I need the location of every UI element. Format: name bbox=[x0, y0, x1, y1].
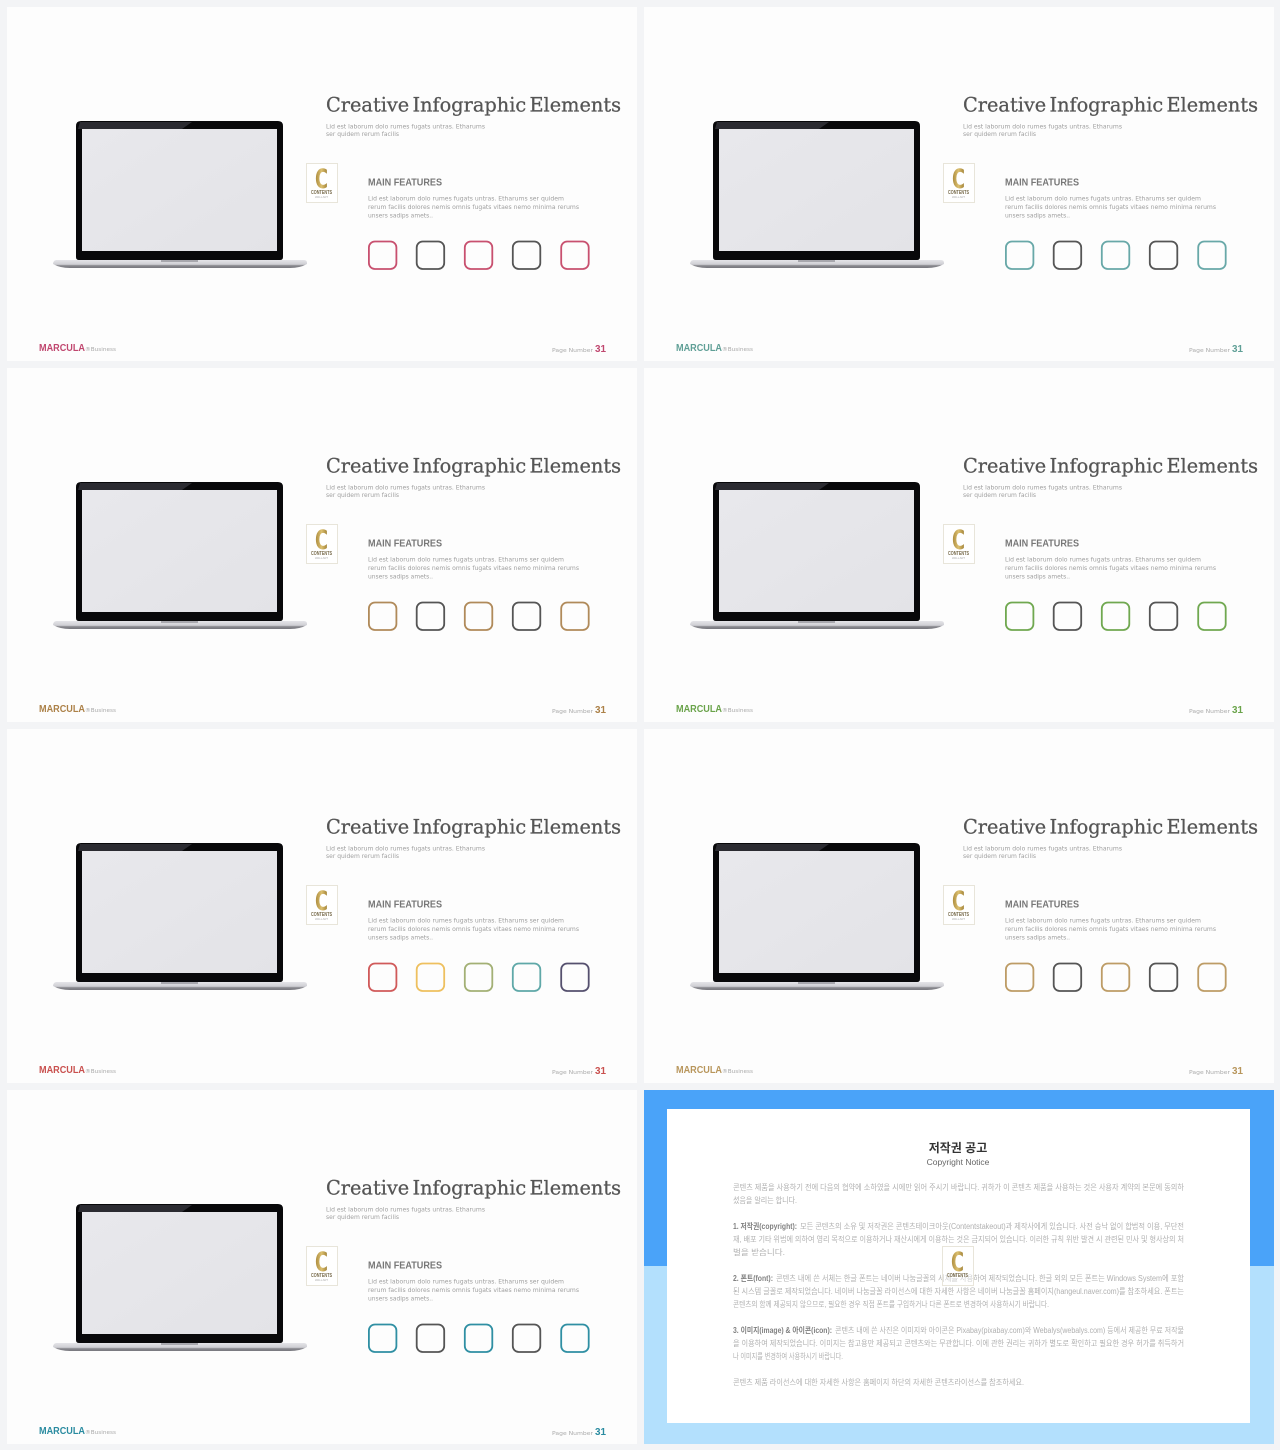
page number bbox=[552, 1427, 606, 1438]
title: Creative Infographic Elements bbox=[326, 1176, 621, 1200]
slide background bbox=[7, 1090, 637, 1444]
icon boxes bbox=[369, 242, 589, 269]
notice section 1 copyright: 재, 배포 기타 위법에 의하여 영리 목적으로 이용하거나 재산시에게 이용하는 것은 금지되어 있습니다. 이러한 규칙 위반 발견 시 관련된 민사 및 형사상의 처 bbox=[733, 1234, 1184, 1244]
page number bbox=[1189, 344, 1243, 355]
notice section 1 copyright: 1. 저작권(copyright): bbox=[733, 1221, 797, 1231]
heading: main features: MAIN FEATURES bbox=[1005, 900, 1079, 910]
icon: contents logo: CONTENTS bbox=[311, 1273, 333, 1279]
notice section 1 copyright: 벌을 받습니다. bbox=[733, 1247, 785, 1257]
title: Creative Infographic Elements bbox=[963, 454, 1258, 478]
features text: rerum facilis dolores nemis omnis fugats vitaes nemo minima rerums bbox=[1005, 925, 1217, 933]
features text bbox=[368, 556, 580, 580]
page number: 31 bbox=[595, 1066, 606, 1077]
icon: contents logo: C bbox=[315, 164, 328, 195]
slide background bbox=[7, 7, 637, 361]
subtitle bbox=[326, 484, 486, 499]
page number: Page Number bbox=[1189, 348, 1231, 354]
icon: contents logo: WALL ART bbox=[315, 918, 328, 921]
page number: 31 bbox=[1232, 1066, 1243, 1077]
icon: laptop bbox=[53, 121, 307, 268]
subtitle bbox=[963, 844, 1123, 860]
icon: contents logo: C bbox=[952, 164, 965, 195]
heading: main features: MAIN FEATURES bbox=[368, 178, 442, 188]
footer brand: ®Business bbox=[722, 707, 753, 714]
icon: contents logo: C bbox=[315, 886, 328, 917]
features text: unsers sadips amets.. bbox=[1005, 934, 1070, 942]
icon: laptop bbox=[53, 1204, 307, 1351]
icon boxes bbox=[369, 602, 589, 630]
subtitle: Lid est laborum dolo rumes fugats untras. Etharums bbox=[963, 484, 1123, 492]
icon: contents logo: C bbox=[952, 886, 965, 917]
features text bbox=[368, 916, 580, 942]
panel: slide 2 teal bbox=[644, 7, 1274, 361]
white card bbox=[667, 1109, 1250, 1423]
footer brand: MARCULA bbox=[39, 1426, 85, 1437]
heading: main features: MAIN FEATURES bbox=[368, 538, 442, 550]
icon: contents logo: C bbox=[315, 525, 328, 556]
subtitle: Lid est laborum dolo rumes fugats untras. Etharums bbox=[326, 122, 486, 130]
icon: contents logo bbox=[306, 164, 338, 202]
features text: Lid est laborum dolo rumes fugats untras. Etharums ser quidem bbox=[368, 916, 564, 924]
notice section 3 image and icon: 나 이미지를 변경하여 사용하시기 바랍니다. bbox=[733, 1351, 843, 1361]
features text: unsers sadips amets.. bbox=[368, 212, 433, 220]
icon: contents logo bbox=[306, 524, 338, 564]
panel: slide 4 green bbox=[644, 368, 1274, 722]
blue top band bbox=[644, 1090, 1274, 1266]
icon: contents logo: C bbox=[952, 525, 965, 556]
heading: main features: MAIN FEATURES bbox=[368, 900, 442, 910]
subtitle: ser quidem rerum facilis bbox=[326, 130, 400, 138]
features text: rerum facilis dolores nemis omnis fugats vitaes nemo minima rerums bbox=[368, 203, 580, 211]
icon: contents logo: CONTENTS bbox=[311, 190, 333, 196]
icon: contents logo bbox=[944, 164, 974, 202]
icon boxes bbox=[369, 964, 589, 991]
subtitle: ser quidem rerum facilis bbox=[326, 491, 400, 499]
subtitle: Lid est laborum dolo rumes fugats untras. Etharums bbox=[326, 844, 486, 852]
subtitle: ser quidem rerum facilis bbox=[963, 491, 1037, 499]
page number: Page Number bbox=[552, 709, 594, 715]
icon: contents logo overlay: C bbox=[951, 1247, 964, 1278]
features text: rerum facilis dolores nemis omnis fugats vitaes nemo minima rerums bbox=[1005, 203, 1217, 211]
icon: contents logo: CONTENTS bbox=[948, 912, 970, 918]
subtitle bbox=[326, 1206, 486, 1221]
features text: unsers sadips amets.. bbox=[368, 1294, 433, 1302]
page number bbox=[552, 344, 606, 355]
notice section 3 image and icon: 을 이용하여 제작되었습니다. 이미지는 참고용만 제공되고 콘텐츠와는 무관합니다. 이에 관한 권리는 귀하가 별도로 확인하고 필요한 경우 허가를 취득하거 bbox=[733, 1338, 1184, 1348]
page number: Page Number bbox=[552, 348, 594, 354]
icon: contents logo: WALL ART bbox=[315, 557, 328, 560]
subtitle: Lid est laborum dolo rumes fugats untras. Etharums bbox=[963, 122, 1123, 130]
notice section 2 font bbox=[733, 1273, 1185, 1309]
notice intro: 셨음을 알리는 합니다. bbox=[733, 1195, 797, 1205]
footer brand: ®Business bbox=[85, 346, 116, 353]
panel: copyright notice bbox=[644, 1090, 1274, 1444]
footer brand bbox=[39, 704, 116, 715]
icon: contents logo: WALL ART bbox=[952, 196, 965, 199]
features text: Lid est laborum dolo rumes fugats untras. Etharums ser quidem bbox=[368, 1278, 564, 1286]
features text bbox=[1005, 194, 1217, 220]
notice closing line: 콘텐츠 제품 라이선스에 대한 자세한 사항은 홈페이지 하단의 자세한 콘텐츠라이선스를 참조하세요. bbox=[733, 1377, 1024, 1387]
light blue bottom band bbox=[644, 1266, 1274, 1444]
features text: unsers sadips amets.. bbox=[368, 934, 433, 942]
footer brand bbox=[676, 343, 753, 354]
features text: rerum facilis dolores nemis omnis fugats vitaes nemo minima rerums bbox=[368, 925, 580, 933]
panel: slide 6 tan bbox=[644, 729, 1274, 1083]
subtitle bbox=[326, 844, 486, 860]
notice section 2 font: 콘텐츠 내에 쓴 서체는 한글 폰트는 네이버 나눔글꼴의 서체를 사용하여 제작되었습니다. 한글 외의 모든 폰트는 Windows System에 포함 bbox=[776, 1273, 1185, 1283]
footer brand: ®Business bbox=[85, 1068, 116, 1075]
notice section 1 copyright: 모든 콘텐츠의 소유 및 저작권은 콘텐츠테이크아웃(Contentstakeout)과 제작사에게 있습니다. 사전 승낙 없이 합법적 이용, 무단전 bbox=[800, 1221, 1184, 1231]
icon: contents logo: CONTENTS bbox=[311, 912, 333, 918]
features text: Lid est laborum dolo rumes fugats untras. Etharums ser quidem bbox=[368, 556, 564, 564]
icon: contents logo bbox=[306, 886, 338, 924]
notice section 2 font: 된 시스템 글꼴로 제작되었습니다. 네이버 나눔글꼴 라이선스에 대한 자세한 사항은 네이버 나눔글꼴 홈페이지(hangeul.naver.com)를 참조하세요. 폰트는 bbox=[733, 1286, 1184, 1296]
subtitle bbox=[963, 122, 1123, 138]
notice subheading: Copyright Notice bbox=[927, 1157, 990, 1167]
panel: slide 1 pink bbox=[7, 7, 637, 361]
page number: Page Number bbox=[552, 1431, 594, 1437]
slide background bbox=[644, 368, 1274, 722]
icon: contents logo: WALL ART bbox=[315, 1279, 328, 1282]
icon: contents logo bbox=[944, 524, 974, 564]
subtitle: Lid est laborum dolo rumes fugats untras. Etharums bbox=[326, 484, 486, 492]
features text bbox=[1005, 916, 1217, 942]
page number: 31 bbox=[1232, 705, 1243, 716]
notice intro bbox=[733, 1182, 1185, 1205]
slide background bbox=[644, 729, 1274, 1083]
icon: contents logo: CONTENTS bbox=[311, 551, 333, 557]
icon: contents logo: WALL ART bbox=[315, 196, 328, 199]
heading: main features: MAIN FEATURES bbox=[1005, 538, 1079, 550]
features text: rerum facilis dolores nemis omnis fugats vitaes nemo minima rerums bbox=[368, 1286, 580, 1294]
features text bbox=[368, 1278, 580, 1302]
page number: 31 bbox=[595, 1427, 606, 1438]
page number bbox=[552, 1066, 606, 1077]
subtitle bbox=[326, 122, 486, 138]
panel: slide 5 multicolor bbox=[7, 729, 637, 1083]
slide background bbox=[644, 7, 1274, 361]
footer brand: MARCULA bbox=[39, 343, 85, 354]
notice section 3 image and icon: 콘텐츠 내에 쓴 사진은 이미지와 아이콘은 Pixabay(pixabay.com)와 Webalys(webalys.com) 등에서 제공한 무료 저작물 bbox=[835, 1325, 1184, 1335]
icon boxes bbox=[1006, 964, 1226, 991]
footer brand: ®Business bbox=[722, 346, 753, 353]
page number bbox=[1189, 1066, 1243, 1077]
page number: Page Number bbox=[1189, 709, 1231, 715]
subtitle: ser quidem rerum facilis bbox=[963, 130, 1037, 138]
features text bbox=[1005, 556, 1217, 580]
footer brand bbox=[39, 343, 116, 354]
subtitle: Lid est laborum dolo rumes fugats untras. Etharums bbox=[963, 844, 1123, 852]
features text: Lid est laborum dolo rumes fugats untras. Etharums ser quidem bbox=[1005, 916, 1201, 924]
icon: contents logo overlay: CONTENTS bbox=[947, 1273, 969, 1279]
features text bbox=[368, 194, 580, 220]
icon: contents logo: CONTENTS bbox=[948, 190, 970, 196]
page number: 31 bbox=[1232, 344, 1243, 355]
icon: laptop bbox=[53, 843, 307, 990]
notice heading: 저작권 공고 bbox=[929, 1140, 987, 1155]
footer brand: MARCULA bbox=[676, 1065, 722, 1076]
features text: Lid est laborum dolo rumes fugats untras. Etharums ser quidem bbox=[1005, 194, 1201, 202]
footer brand: MARCULA bbox=[39, 704, 85, 715]
icon: contents logo: WALL ART bbox=[952, 557, 965, 560]
notice section 3 image and icon bbox=[733, 1325, 1184, 1361]
heading: main features: MAIN FEATURES bbox=[1005, 178, 1079, 188]
icon boxes bbox=[1006, 242, 1226, 269]
panel: slide 3 brown bbox=[7, 368, 637, 722]
footer brand: MARCULA bbox=[676, 704, 722, 715]
icon boxes bbox=[1006, 602, 1226, 630]
title: Creative Infographic Elements bbox=[326, 454, 621, 478]
icon: contents logo overlay bbox=[942, 1246, 974, 1286]
slide background bbox=[7, 729, 637, 1083]
footer brand: ®Business bbox=[722, 1068, 753, 1075]
page number: Page Number bbox=[1189, 1070, 1231, 1076]
footer brand: ®Business bbox=[85, 1429, 116, 1436]
footer brand bbox=[39, 1065, 116, 1076]
title: Creative Infographic Elements bbox=[963, 814, 1258, 838]
icon: laptop bbox=[690, 843, 944, 990]
icon: laptop bbox=[53, 482, 307, 629]
notice section 2 font: 콘텐츠의 함께 제공되지 않으므로, 필요한 경우 직접 폰트를 구입하거나 다른 폰트로 변경하여 사용하시기 바랍니다. bbox=[733, 1299, 1049, 1309]
footer brand: MARCULA bbox=[676, 343, 722, 354]
page number bbox=[1189, 705, 1243, 716]
subtitle: ser quidem rerum facilis bbox=[963, 852, 1037, 860]
footer brand bbox=[676, 704, 753, 715]
footer brand bbox=[39, 1426, 116, 1437]
features text: unsers sadips amets.. bbox=[1005, 572, 1070, 580]
features text: rerum facilis dolores nemis omnis fugats vitaes nemo minima rerums bbox=[1005, 564, 1217, 572]
slide background bbox=[7, 368, 637, 722]
icon: contents logo: WALL ART bbox=[952, 918, 965, 921]
icon: contents logo bbox=[944, 886, 974, 924]
notice intro: 콘텐츠 제품을 사용하기 전에 다음의 협약에 소하였을 시에만 읽어 주시기 바랍니다. 귀하가 이 콘텐츠 제품을 사용하는 것은 사용자 계약의 본문에 동의하 bbox=[733, 1182, 1185, 1192]
features text: Lid est laborum dolo rumes fugats untras. Etharums ser quidem bbox=[368, 194, 564, 202]
subtitle: ser quidem rerum facilis bbox=[326, 852, 400, 860]
footer brand: ®Business bbox=[85, 707, 116, 714]
features text: unsers sadips amets.. bbox=[368, 572, 433, 580]
notice section 1 copyright bbox=[733, 1221, 1184, 1257]
notice section 3 image and icon: 3. 이미지(image) & 아이콘(icon): bbox=[733, 1325, 832, 1335]
icon boxes bbox=[369, 1324, 589, 1352]
title: Creative Infographic Elements bbox=[326, 814, 621, 838]
footer brand bbox=[676, 1065, 753, 1076]
subtitle bbox=[963, 484, 1123, 499]
icon: laptop bbox=[690, 482, 944, 629]
icon: contents logo: CONTENTS bbox=[948, 551, 970, 557]
subtitle: ser quidem rerum facilis bbox=[326, 1213, 400, 1221]
page number: 31 bbox=[595, 705, 606, 716]
heading: main features: MAIN FEATURES bbox=[368, 1260, 442, 1272]
page number: 31 bbox=[595, 344, 606, 355]
notice section 2 font: 2. 폰트(font): bbox=[733, 1274, 773, 1283]
icon: contents logo: C bbox=[315, 1247, 328, 1278]
features text: unsers sadips amets.. bbox=[1005, 212, 1070, 220]
panel: slide 7 blue-teal bbox=[7, 1090, 637, 1444]
icon: laptop bbox=[690, 121, 944, 268]
footer brand: MARCULA bbox=[39, 1065, 85, 1076]
subtitle: Lid est laborum dolo rumes fugats untras. Etharums bbox=[326, 1206, 486, 1214]
page number: Page Number bbox=[552, 1070, 594, 1076]
icon: contents logo bbox=[306, 1246, 338, 1286]
features text: Lid est laborum dolo rumes fugats untras. Etharums ser quidem bbox=[1005, 556, 1201, 564]
title: Creative Infographic Elements bbox=[326, 92, 621, 116]
features text: rerum facilis dolores nemis omnis fugats vitaes nemo minima rerums bbox=[368, 564, 580, 572]
title: Creative Infographic Elements bbox=[963, 92, 1258, 116]
page number bbox=[552, 705, 606, 716]
